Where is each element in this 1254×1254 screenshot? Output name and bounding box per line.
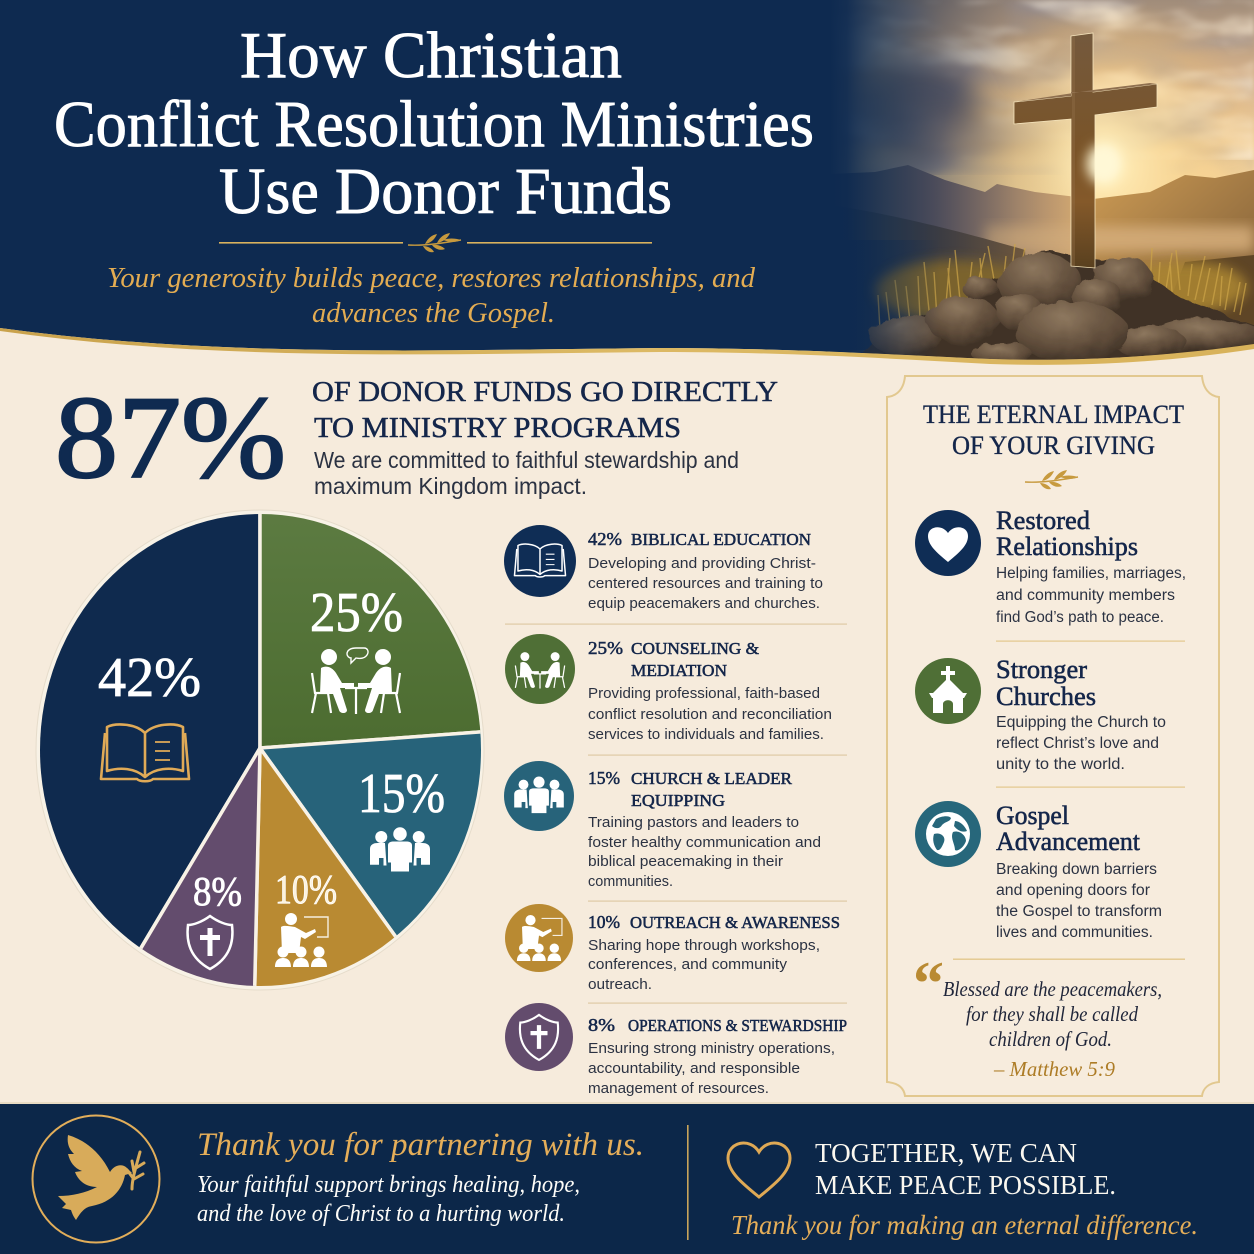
title: Conflict Resolution Ministries: [54, 88, 814, 161]
item: biblical education: Developing and providing Christ-: [588, 555, 816, 572]
key stat heading: OF DONOR FUNDS GO DIRECTLY: [312, 376, 778, 408]
item: church and leader equipping: foster healthy communication and: [588, 834, 821, 851]
impact: stronger churches: unity to the world.: [996, 756, 1125, 773]
item: biblical education: [504, 525, 823, 612]
footer thank-you heading: Thank you for partnering with us.: [197, 1127, 644, 1163]
slice: 10% outreach: [256, 750, 397, 986]
item: biblical education: BIBLICAL EDUCATION: [631, 530, 811, 549]
item: counseling and mediation: 25%: [588, 638, 623, 658]
icon: shield cross: [188, 916, 232, 969]
item: counseling and mediation: Providing professional, faith-based: [588, 685, 820, 702]
impact: gospel advancement: [915, 801, 1162, 941]
panel heading: THE ETERNAL IMPACT: [923, 399, 1184, 429]
impact: gospel advancement: Advancement: [996, 827, 1141, 856]
quote: Blessed are the peacemakers,: [943, 977, 1162, 1001]
footer thank-you body: and the love of Christ to a hurting world.: [197, 1201, 565, 1227]
pie labels: 42%: [98, 647, 201, 709]
item: operations and stewardship: 8%: [588, 1015, 615, 1035]
impact: restored relationships: find God’s path to peace.: [996, 609, 1164, 626]
panel: eternal impact: [887, 376, 1219, 1096]
slice: 15% church and leader: [258, 730, 481, 936]
pie labels: 25%: [310, 582, 403, 644]
impact: gospel advancement: and opening doors for: [996, 882, 1150, 899]
header banner: [0, 0, 1254, 370]
footer call to action: MAKE PEACE POSSIBLE.: [815, 1169, 1116, 1200]
icon: open book: [101, 725, 189, 781]
pie labels: 8%: [193, 868, 242, 914]
subtitle: [107, 262, 755, 329]
item: counseling and mediation: conflict resolution and reconciliation: [588, 706, 832, 723]
title: Use Donor Funds: [219, 155, 672, 228]
item: biblical education: equip peacemakers and churches.: [588, 595, 820, 612]
key stat description: We are committed to faithful stewardship and: [314, 447, 739, 473]
key stat heading: TO MINISTRY PROGRAMS: [314, 412, 681, 444]
icon: people group: [370, 827, 430, 872]
sun flare: [1087, 144, 1121, 184]
panel heading: OF YOUR GIVING: [952, 430, 1155, 460]
item: outreach and awareness: OUTREACH & AWARENESS: [630, 913, 840, 932]
key stat description: maximum Kingdom impact.: [314, 473, 587, 499]
item: outreach and awareness: outreach.: [588, 976, 652, 993]
item: operations and stewardship: OPERATIONS & STEWARDSHIP: [628, 1016, 847, 1035]
key stat heading: [312, 376, 778, 444]
subtitle: Your generosity builds peace, restores relationships, and: [107, 262, 755, 294]
title divider with sprig: [219, 233, 652, 252]
pie labels: [98, 582, 445, 914]
quote: “: [913, 950, 944, 1018]
icon: dove in circle: [32, 1116, 160, 1242]
impact: restored relationships: Restored: [996, 506, 1090, 535]
impact: gospel advancement: Gospel: [996, 801, 1069, 830]
item: operations and stewardship: accountability, and responsible: [588, 1060, 800, 1077]
subtitle: advances the Gospel.: [312, 297, 555, 329]
slice: 25% counseling: [258, 514, 480, 748]
impact: restored relationships: [915, 506, 1186, 626]
slice: 8% operations: [140, 748, 262, 986]
cross: [1014, 33, 1157, 268]
item: outreach and awareness: 10%: [588, 912, 620, 932]
pie labels: 15%: [358, 763, 445, 825]
impact: restored relationships: and community members: [996, 587, 1175, 604]
icon: counseling meeting: [312, 648, 400, 714]
item: operations and stewardship: Ensuring strong ministry operations,: [588, 1040, 835, 1057]
impact: stronger churches: reflect Christ’s love and: [996, 735, 1159, 752]
impact: gospel advancement: lives and communities.: [996, 924, 1153, 941]
impact: stronger churches: Equipping the Church to: [996, 714, 1166, 731]
pie labels: 10%: [275, 866, 337, 912]
icon: heart outline: [728, 1143, 790, 1197]
pie chart: [36, 510, 484, 990]
item: outreach and awareness: Sharing hope through workshops,: [588, 937, 820, 954]
panel heading: [923, 399, 1184, 460]
key stat: 87%: 87%: [55, 372, 286, 503]
footer call to action: [815, 1137, 1116, 1200]
item: biblical education: centered resources and training to: [588, 575, 823, 592]
impact: stronger churches: Stronger: [996, 655, 1087, 684]
item: church and leader equipping: [504, 761, 821, 890]
impact: gospel advancement: Breaking down barriers: [996, 861, 1157, 878]
item: outreach and awareness: [505, 904, 840, 993]
impact: restored relationships: Helping families, marriages,: [996, 565, 1186, 582]
left-edge dimming over foreground: [830, 240, 934, 356]
item: church and leader equipping: 15%: [588, 768, 620, 788]
quote: for they shall be called: [966, 1002, 1138, 1026]
panel frame: [887, 376, 1219, 1096]
icon: sprig: [1025, 470, 1078, 489]
quote: [913, 950, 1162, 1081]
grass: [875, 244, 1247, 330]
impact: gospel advancement: the Gospel to transform: [996, 903, 1162, 920]
item: operations and stewardship: management of resources.: [588, 1080, 769, 1097]
item: counseling and mediation: COUNSELING &: [631, 639, 759, 658]
rock pile: [850, 253, 1254, 370]
impact: stronger churches: [915, 655, 1166, 773]
allocation list: [504, 525, 847, 1097]
title: [54, 19, 814, 228]
item: church and leader equipping: biblical peacemaking in their: [588, 853, 783, 870]
item: church and leader equipping: Training pastors and leaders to: [588, 814, 799, 831]
footer thank-you body: [197, 1172, 580, 1227]
footer thank-you body: Your faithful support brings healing, hope,: [197, 1172, 580, 1198]
item: church and leader equipping: CHURCH & LEADER: [631, 769, 793, 788]
quote: children of God.: [989, 1027, 1112, 1051]
impact: restored relationships: Relationships: [996, 532, 1138, 561]
footer closing line: Thank you for making an eternal difference.: [731, 1210, 1198, 1240]
footer band: [0, 1102, 1254, 1254]
item: counseling and mediation: services to individuals and families.: [588, 726, 824, 743]
icon: teacher: [275, 913, 328, 967]
item: counseling and mediation: MEDIATION: [631, 661, 727, 680]
item: operations and stewardship: [505, 1003, 847, 1097]
item: outreach and awareness: conferences, and community: [588, 956, 788, 973]
quote: – Matthew 5:9: [993, 1057, 1115, 1081]
item: counseling and mediation: [505, 634, 832, 743]
item: church and leader equipping: EQUIPPING: [631, 791, 725, 810]
key stat description: [314, 447, 739, 499]
item: biblical education: 42%: [588, 529, 622, 549]
title: How Christian: [240, 19, 622, 92]
gold wave line: [0, 328, 1254, 365]
photo: sunset cross on a hill: [830, 0, 1254, 370]
impact: stronger churches: Churches: [996, 682, 1096, 711]
item: church and leader equipping: communities.: [588, 873, 673, 890]
slice: 42% biblical education: [40, 514, 258, 948]
footer call to action: TOGETHER, WE CAN: [815, 1137, 1077, 1168]
